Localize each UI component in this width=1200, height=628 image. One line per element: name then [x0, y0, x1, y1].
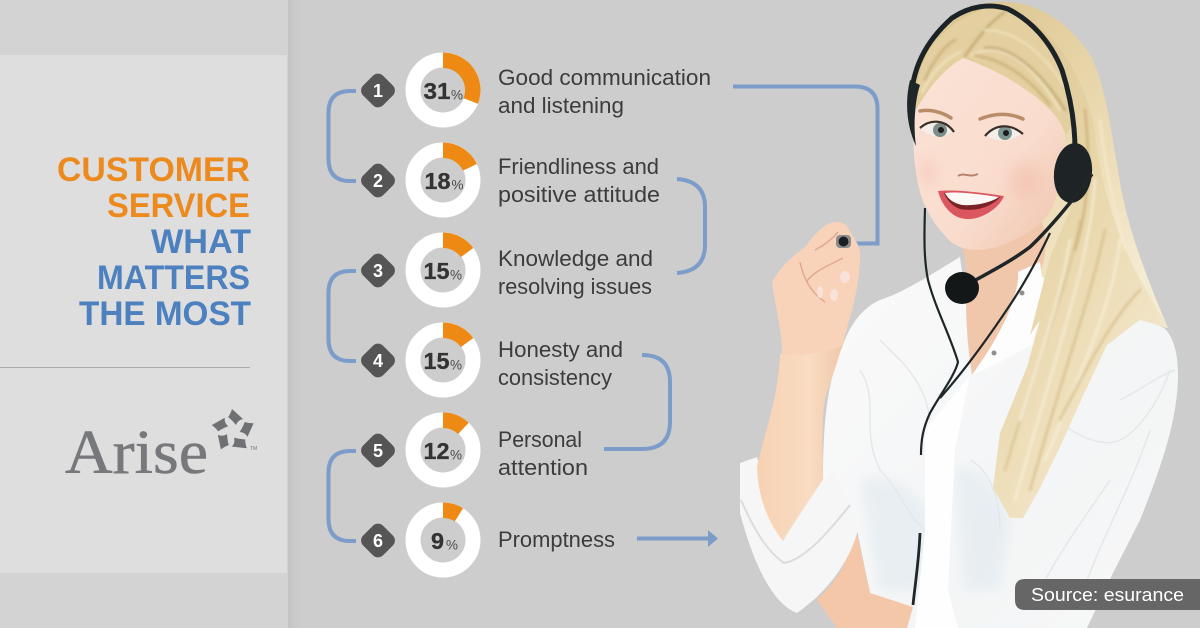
donut 12%: % — [450, 448, 462, 462]
hair top — [915, 5, 1076, 135]
logo: Arise — [65, 409, 257, 487]
badge 1: 1 — [373, 81, 383, 101]
eyebrows — [920, 110, 1023, 119]
pen — [836, 235, 851, 248]
hair top strands — [922, 12, 1070, 110]
title: WHAT — [151, 223, 251, 261]
hair back — [913, 2, 1168, 335]
source tag — [1015, 579, 1200, 610]
donut 9%: 9 — [431, 528, 444, 554]
item 3: 15% — [358, 232, 653, 300]
shirt placket — [915, 375, 970, 628]
connector: items 3 and 4 — [328, 271, 356, 361]
label: Promptness — [498, 527, 615, 552]
neck — [962, 222, 1046, 375]
label: Friendliness and — [498, 154, 659, 179]
collar buttons — [992, 290, 1024, 356]
label — [498, 337, 623, 390]
label: Good communication — [498, 65, 711, 90]
donut 12%: 12 — [424, 438, 450, 464]
donut 18%: 18 — [424, 168, 451, 194]
photo: customer service agent with headset — [740, 2, 1178, 628]
eye left — [920, 122, 954, 137]
label: positive attitude — [498, 182, 660, 207]
connector: item 1 to hand — [733, 86, 878, 244]
title — [57, 151, 251, 333]
badge 5 — [358, 431, 398, 470]
title: THE MOST — [79, 295, 251, 333]
label — [498, 246, 653, 299]
right ear cup — [1051, 141, 1095, 205]
shirt folds and pattern — [860, 340, 1175, 600]
item 1: 31% — [358, 52, 711, 120]
connector: items 1 and 2 — [328, 91, 356, 181]
label: Personal — [498, 427, 582, 452]
eye right — [985, 126, 1023, 141]
badge 4: 4 — [373, 351, 383, 371]
panel: title and logo — [0, 55, 287, 573]
collar — [972, 262, 1045, 375]
shirt shading — [860, 468, 1010, 590]
label: attention — [498, 455, 588, 480]
badge 6 — [358, 521, 398, 560]
donut 9% — [413, 502, 473, 570]
item 6: 9% — [358, 502, 615, 570]
cuff edge — [741, 500, 850, 563]
donut 9%: % — [446, 538, 458, 552]
donut 31%: 31 — [424, 78, 451, 104]
source tag: Source: esurance — [1031, 585, 1184, 605]
badge 2: 2 — [373, 171, 383, 191]
finger lines — [800, 232, 843, 302]
donut 15% — [413, 322, 473, 390]
donut 18% — [413, 142, 477, 210]
donut 15%: % — [450, 268, 462, 282]
item 2: 18% — [358, 142, 660, 210]
label: consistency — [498, 365, 612, 390]
item 4: 15% — [358, 322, 623, 390]
badge 3: 3 — [373, 261, 383, 281]
donut 12% — [413, 412, 473, 480]
donut 31% — [413, 52, 481, 120]
sleeve — [740, 457, 858, 613]
badge 5: 5 — [373, 441, 383, 461]
upper hand — [772, 222, 860, 355]
shirt — [823, 257, 1178, 628]
donut 15% — [413, 232, 473, 300]
donut 31%: % — [451, 88, 463, 102]
donut 15%: 15 — [424, 258, 450, 284]
title: CUSTOMER — [57, 151, 250, 189]
logo: Arise: Arise — [65, 419, 208, 487]
logo: Arise: TM — [250, 446, 257, 452]
badge 6: 6 — [373, 531, 383, 551]
title: MATTERS — [97, 259, 250, 297]
connector: items 2 and 3 text — [677, 179, 705, 273]
hair strands — [1005, 110, 1140, 500]
face — [913, 58, 1065, 250]
fingernails — [817, 271, 850, 301]
label: Honesty and — [498, 337, 623, 362]
label: and listening — [498, 93, 624, 118]
label — [498, 154, 660, 207]
badge 2 — [358, 161, 398, 200]
badge 4 — [358, 341, 398, 380]
connector: items 4 and 5 text — [604, 355, 670, 449]
donut 15%: % — [450, 358, 462, 372]
badge 1 — [358, 71, 398, 110]
donut 15%: 15 — [424, 348, 450, 374]
hair front lock — [993, 20, 1168, 518]
label: Knowledge and — [498, 246, 653, 271]
mic boom — [972, 174, 1092, 282]
donut 18%: % — [452, 178, 464, 192]
label: resolving issues — [498, 274, 652, 299]
arrow: promptness — [637, 530, 718, 547]
nose — [958, 174, 978, 176]
title: SERVICE — [107, 187, 250, 225]
label — [498, 427, 588, 480]
icon: pinwheel — [211, 409, 257, 455]
left ear cup — [907, 80, 920, 146]
connector: items 5 and 6 — [328, 451, 356, 541]
item 5: 12% — [358, 412, 588, 480]
forearm — [757, 330, 845, 541]
badge 3 — [358, 251, 398, 290]
cheek blush — [920, 158, 1041, 198]
cable — [913, 208, 1050, 605]
headband — [911, 6, 1075, 150]
mic foam — [945, 272, 979, 304]
lower hand — [817, 533, 913, 628]
label — [498, 65, 711, 118]
mouth — [938, 190, 1004, 219]
